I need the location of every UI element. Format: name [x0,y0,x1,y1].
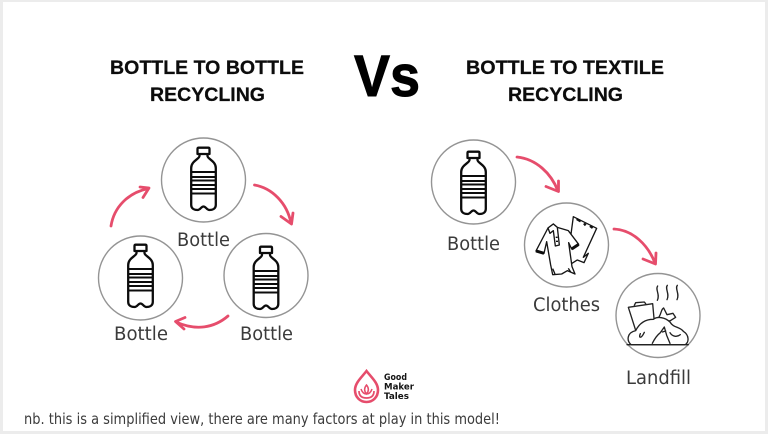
node: bottle [432,140,516,255]
arrow: bottle to clothes [517,157,558,192]
node: lower right bottle: Bottle [240,324,293,345]
node: clothes: Clothes [533,295,600,316]
arrow: lower right to lower left [176,316,228,329]
arrow: lower left to top [111,187,149,226]
node: landfill: Landfill [626,368,691,389]
node: lower left bottle [98,236,182,345]
wordmark [384,373,415,402]
diagram: bottle to bottle loop [98,138,308,345]
node: clothes [524,203,608,316]
node: lower right bottle [224,234,308,345]
arrow: top to lower right [254,185,293,224]
wordmark: Good [384,373,407,383]
wordmark: Maker [384,382,415,392]
arrow: clothes to landfill [614,229,656,264]
icon: red drop with lotus [355,371,378,402]
diagram: bottle to textile chain [432,140,700,389]
node: landfill [616,274,700,389]
node: top bottle [162,138,246,251]
heading: bottle to bottle recycling [110,58,304,106]
heading: bottle to textile recycling [466,58,664,106]
icon: landfill [627,285,688,345]
heading: bottle to bottle recycling: RECYCLING [150,85,265,106]
footnote: nb. this is a simplified view, there are many factors at play in this model! [24,411,500,428]
node: bottle: Bottle [447,234,500,255]
node: top bottle: Bottle [177,230,230,251]
wordmark: Tales [384,392,409,402]
node: lower left bottle: Bottle [114,324,168,345]
heading: bottle to bottle recycling: BOTTLE TO BOTTLE [110,58,304,79]
logo: Good Maker Tales [355,371,415,402]
heading: versus: Vs [354,44,420,109]
heading: bottle to textile recycling: BOTTLE TO TEXTILE [466,58,664,79]
heading: bottle to textile recycling: RECYCLING [508,85,623,106]
icon: clothes [536,217,597,275]
